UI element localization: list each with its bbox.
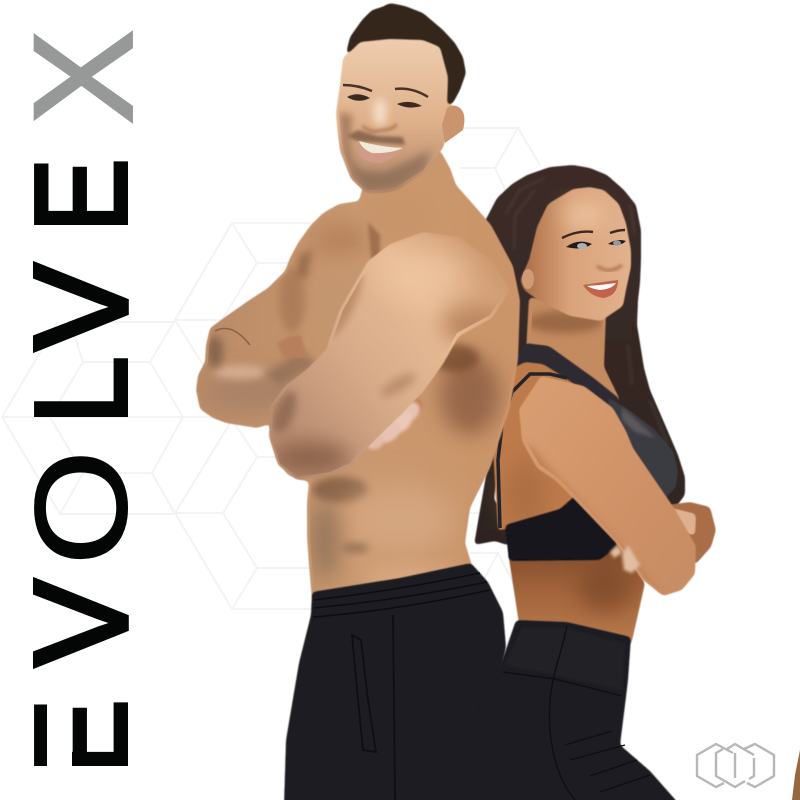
man face — [336, 38, 452, 193]
pants waistband — [313, 573, 490, 617]
man figure — [196, 3, 520, 800]
gap in first E — [47, 700, 72, 772]
man pants — [284, 563, 506, 800]
background hexagon pattern — [2, 128, 540, 609]
letter L: L — [8, 356, 153, 425]
woman mouth — [583, 280, 618, 298]
cropped skin fragment at lower right — [792, 750, 800, 800]
man neck and torso — [196, 150, 520, 600]
midriff — [508, 542, 645, 645]
leggings waistband — [505, 628, 625, 690]
woman face — [520, 187, 631, 321]
letter O: O — [9, 450, 154, 565]
woman ear — [522, 269, 534, 289]
logo: three linked hexagons — [697, 744, 774, 787]
letter V: V — [6, 264, 155, 350]
letter E: E — [8, 699, 154, 773]
woman forehead highlight — [565, 203, 605, 227]
back shading — [505, 461, 545, 529]
man right arm and shoulder — [269, 232, 510, 480]
bra mesh panel — [622, 407, 655, 438]
midriff shadow — [579, 568, 631, 612]
man ear — [442, 106, 464, 143]
woman right forearm — [667, 502, 716, 565]
man left fist — [277, 335, 307, 358]
letter V: V — [6, 580, 155, 666]
woman neck — [526, 297, 621, 402]
woman eyes — [566, 240, 626, 249]
woman hand — [664, 506, 696, 536]
neck shadow — [527, 311, 603, 333]
man nose — [362, 98, 397, 131]
thin bra strap — [498, 374, 567, 528]
wordmark: EVOLVEX rotated — [4, 30, 161, 773]
man fingers — [364, 396, 426, 452]
woman brows — [562, 230, 625, 238]
man mouth — [357, 141, 403, 163]
man brows — [343, 85, 428, 97]
sports bra straps — [510, 343, 621, 410]
sports bra front — [606, 396, 678, 504]
letter X: X — [4, 30, 161, 124]
man eyes — [347, 94, 422, 108]
face shading — [339, 112, 430, 190]
letter E: E — [8, 158, 154, 232]
leggings seams — [503, 626, 650, 800]
woman fingers — [610, 545, 640, 573]
woman arm — [519, 376, 696, 596]
man hair — [345, 3, 466, 106]
man mustache shadow — [347, 130, 405, 145]
woman back and side — [493, 355, 604, 531]
woman nose — [597, 265, 622, 270]
hair highlights — [505, 178, 668, 445]
arm shadow — [528, 444, 652, 584]
arm shading — [269, 251, 509, 474]
woman figure — [465, 165, 716, 800]
sports bra band — [505, 494, 620, 561]
woman hair — [474, 165, 685, 546]
pants creases — [352, 615, 395, 800]
man body shading — [205, 193, 500, 588]
leggings — [465, 620, 680, 800]
